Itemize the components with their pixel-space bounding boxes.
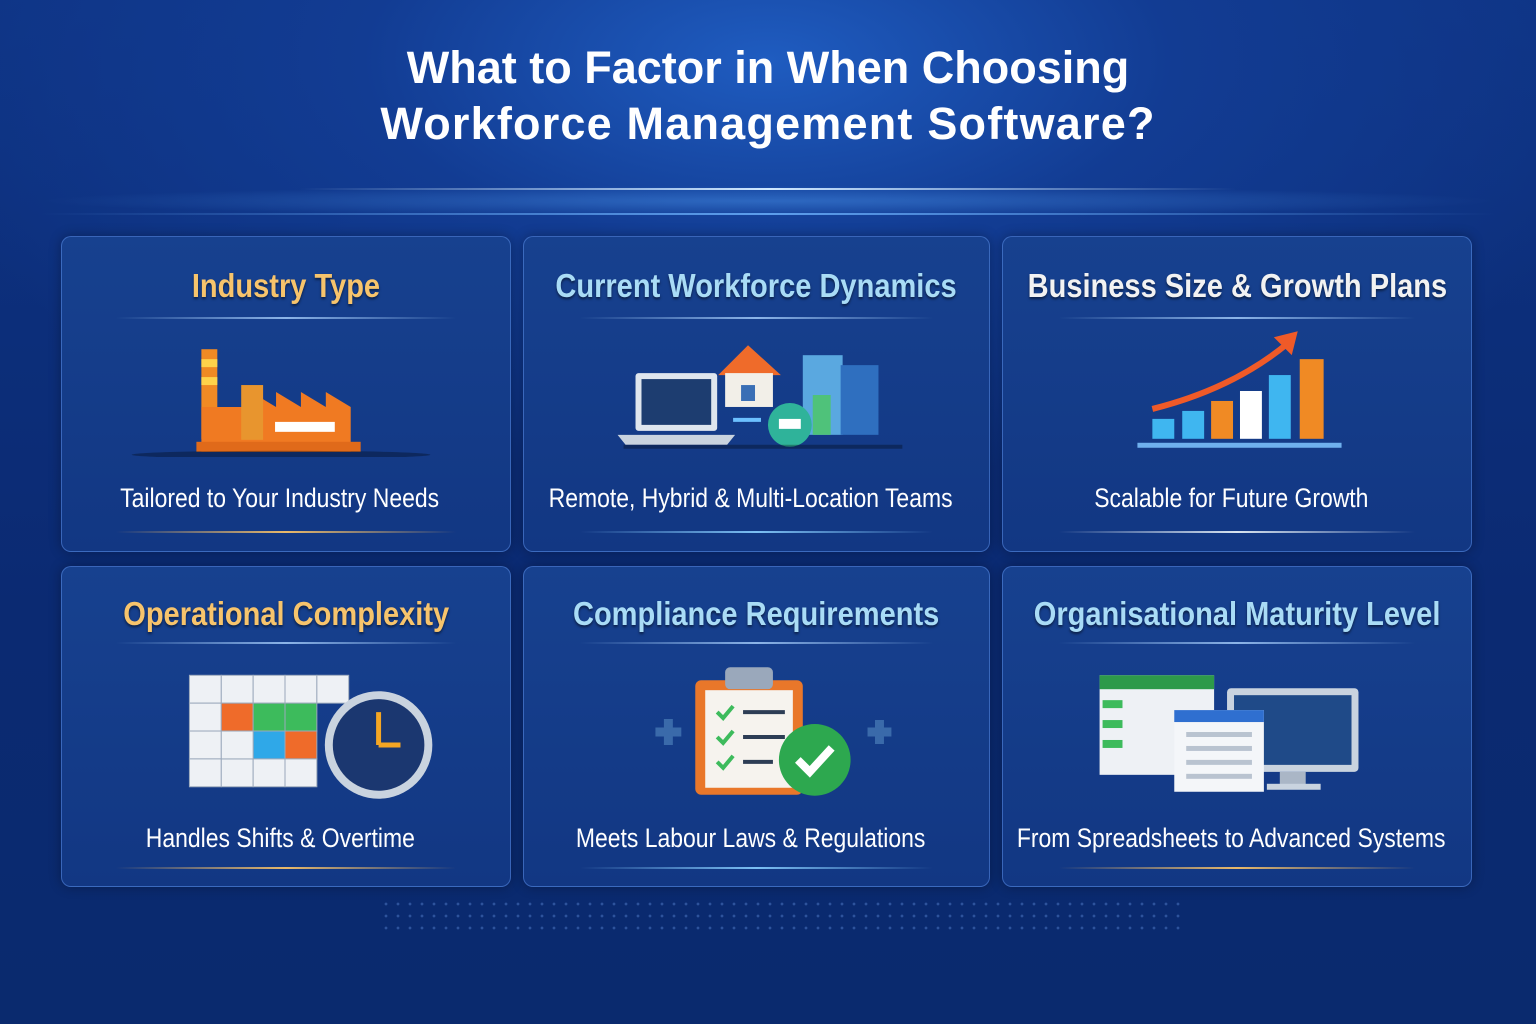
caption: Remote, Hybrid & Multi-Location Teams	[549, 483, 952, 513]
icon: spreadsheet and monitor	[1100, 675, 1358, 792]
title: Workforce Management Software?	[380, 98, 1156, 149]
panel: business size	[1002, 236, 1472, 552]
panel: compliance	[523, 566, 990, 887]
icon: growth bar chart	[1137, 331, 1342, 448]
heading: industry type: Industry Type	[192, 267, 380, 304]
title: What to Factor in When Choosing	[407, 42, 1129, 93]
panel: maturity	[1002, 566, 1472, 887]
title	[380, 42, 1156, 149]
heading: compliance: Compliance Requirements	[573, 595, 940, 632]
panel: industry type	[61, 236, 511, 552]
panel: workforce dynamics	[523, 236, 990, 552]
heading: business size: Business Size & Growth Plans	[1027, 267, 1447, 304]
heading: maturity: Organisational Maturity Level	[1034, 595, 1440, 632]
icon: laptop house buildings	[618, 345, 902, 449]
heading: workforce dynamics: Current Workforce Dynamics	[556, 267, 957, 304]
caption: Handles Shifts & Overtime	[145, 823, 415, 853]
icon: factory	[132, 349, 430, 457]
caption: From Spreadsheets to Advanced Systems	[1017, 823, 1445, 853]
caption: Scalable for Future Growth	[1094, 483, 1368, 513]
icon: clipboard with check	[656, 667, 892, 796]
panel: operational complexity	[61, 566, 511, 887]
heading: operational complexity: Operational Complexity	[123, 595, 449, 632]
caption: Meets Labour Laws & Regulations	[576, 823, 925, 853]
icon: schedule grid and clock	[188, 674, 432, 799]
caption: Tailored to Your Industry Needs	[121, 483, 439, 513]
